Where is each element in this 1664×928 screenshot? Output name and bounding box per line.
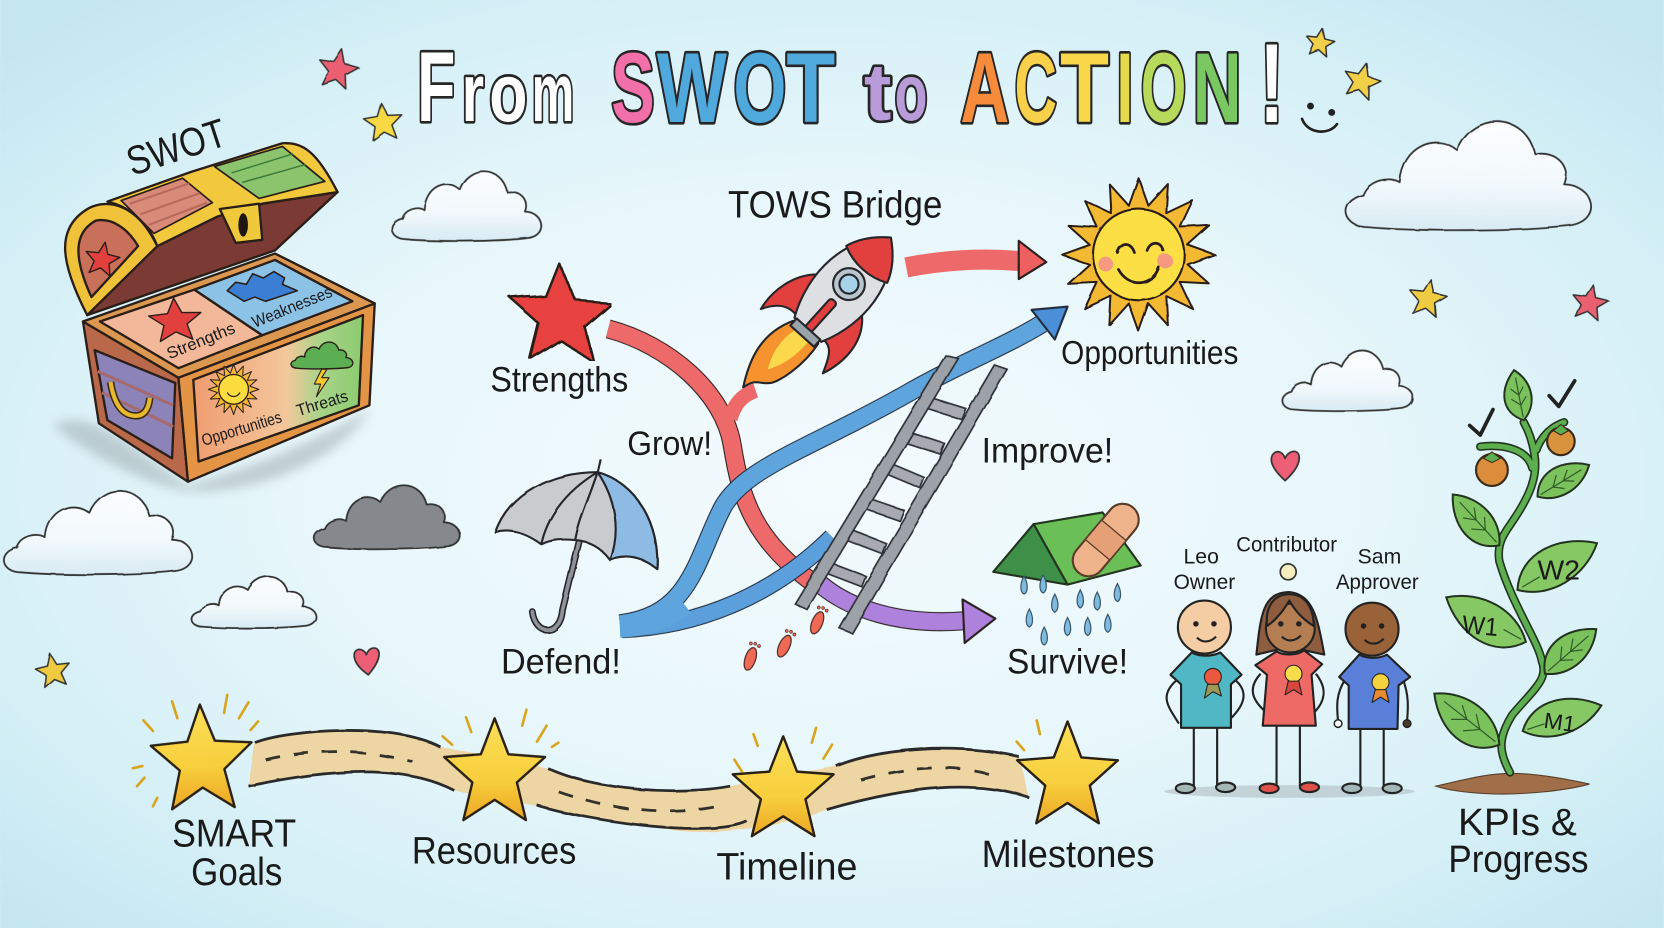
panel: team (1164, 534, 1419, 798)
second fruit (1547, 424, 1575, 455)
team labels: Leo (1184, 545, 1219, 568)
panel: team: Contributor (1236, 534, 1337, 557)
arrow: purple Survive path (817, 581, 995, 643)
panel: roadmap: Resources (412, 830, 576, 873)
hearts (354, 451, 1299, 675)
arrow: blue Improve path (620, 307, 1068, 629)
chest latch (220, 204, 262, 243)
chest lid interior (87, 192, 338, 315)
label: Improve!: Improve! (982, 432, 1113, 471)
title: F (417, 32, 455, 143)
panel: SWOT treasure chest: Weaknesses (249, 283, 335, 332)
decorative stars (33, 26, 1611, 689)
chest top face (83, 254, 375, 378)
clouds (4, 122, 1591, 628)
panel: SWOT treasure chest (53, 143, 375, 492)
icon: patched green roof (993, 497, 1145, 585)
label: KPIs & Progress: Progress (1448, 838, 1588, 881)
title: A (960, 33, 1009, 144)
person: contributor (1253, 592, 1324, 793)
band-aid (1066, 497, 1145, 583)
chest lid top (107, 143, 338, 246)
panel: roadmap: Goals (191, 850, 282, 894)
panel: roadmap: Milestones (982, 833, 1155, 876)
panel: roadmap: Timeline (716, 846, 857, 889)
rocket body (785, 217, 914, 351)
title (417, 20, 1284, 146)
quadrant icons (147, 296, 203, 342)
label: Survive!: Survive! (1007, 643, 1128, 682)
title: m (532, 46, 574, 139)
quadrant labels: Strengths (164, 319, 238, 363)
soil (1436, 773, 1590, 794)
label: Defend!: Defend! (501, 643, 621, 682)
stem (1480, 422, 1564, 772)
sparkles (133, 695, 1040, 806)
chest shadow (53, 408, 369, 492)
ground shadow (1164, 785, 1414, 798)
title: O (733, 33, 786, 144)
title: S (611, 33, 655, 144)
icon: strengths star (510, 262, 607, 356)
title: t (864, 48, 891, 138)
icon: rain drops (1021, 575, 1121, 645)
chest left face (83, 321, 188, 482)
icon: umbrella (496, 459, 657, 630)
label: Grow!: Grow! (627, 425, 712, 463)
label: KPIs & Progress (1448, 801, 1588, 881)
chest front face (178, 303, 375, 482)
panel: SWOT treasure chest: Threats (294, 387, 350, 420)
label: KPIs & Progress: KPIs & (1458, 801, 1577, 844)
chest lid side arch (65, 204, 157, 315)
panel: team: Owner (1174, 571, 1235, 594)
title: o (489, 46, 528, 139)
rocket fins (760, 261, 826, 329)
icon: rocket (713, 204, 925, 425)
check marks (1470, 381, 1575, 435)
road (248, 730, 1029, 832)
person: Leo owner (1167, 601, 1244, 793)
heading: SWOT: SWOT (121, 110, 232, 185)
title: W (657, 33, 728, 144)
arrow: rocket to sun (906, 241, 1046, 279)
icon: contributor swirl (1280, 564, 1296, 580)
person: Sam approver (1334, 603, 1411, 793)
title: C (1014, 33, 1057, 144)
rocket flame (731, 315, 819, 406)
panel: KPI plant: M1 (1542, 708, 1577, 737)
leaf labels: W2 (1538, 554, 1580, 585)
heading: TOWS Bridge: TOWS Bridge (728, 183, 942, 226)
icon: ladder (795, 355, 1007, 633)
panel: team: Approver (1336, 571, 1419, 594)
title: I (1116, 33, 1133, 144)
panel: team: Sam (1358, 545, 1401, 568)
label: Opportunities: Opportunities (1061, 334, 1238, 371)
title: T (786, 33, 835, 144)
title: ! (1260, 20, 1284, 146)
leaves (1421, 368, 1606, 761)
panel: SWOT treasure chest: Opportunities (199, 408, 284, 450)
panel: KPI plant (1421, 368, 1606, 881)
milestone stars (149, 703, 1118, 836)
fruits (1476, 452, 1508, 486)
icon: footprints (741, 605, 829, 672)
icon: smiling sun (1062, 178, 1215, 331)
panel: KPI plant: W1 (1461, 611, 1499, 642)
title: T (1060, 33, 1109, 144)
label: Strengths: Strengths (490, 360, 628, 399)
icon: smiley (1302, 104, 1337, 132)
title: N (1193, 33, 1242, 144)
arrow: red Grow path (608, 329, 817, 586)
road labels: SMART (172, 812, 296, 856)
title: r (462, 46, 484, 139)
title: o (895, 48, 927, 138)
chest handle (111, 382, 150, 416)
panel: roadmap (133, 695, 1155, 894)
title: O (1141, 33, 1186, 144)
